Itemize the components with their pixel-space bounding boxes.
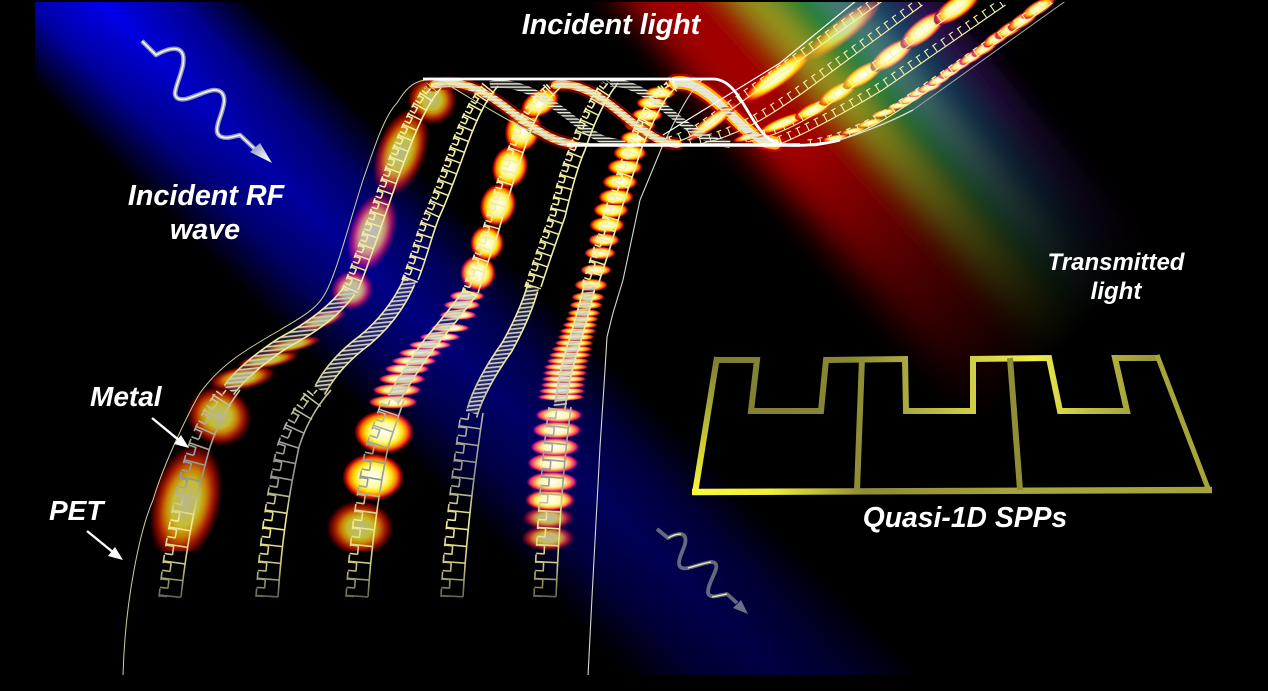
inset dividers: [857, 358, 1020, 490]
inset: quasi-1D SPP unit cells: [692, 355, 1212, 493]
strip 1: [159, 0, 882, 597]
PET substrate outline: [123, 0, 1067, 676]
blue incident RF beam: [35, 2, 910, 675]
label: metal: Metal: [90, 381, 163, 412]
label: transmitted light: light: [1091, 278, 1142, 305]
strip 2: [256, 0, 922, 597]
strip 5: [534, 0, 1052, 597]
hot spots: field intensity on the strips: [137, 0, 1059, 572]
icon: transmitted RF wave arrow: [657, 529, 748, 614]
strip 1 field spots: [137, 75, 457, 572]
label: incident RF wave: wave: [170, 214, 240, 246]
arrow: PET pointer: [87, 531, 123, 560]
label: PET: PET: [49, 495, 106, 526]
fold glow on the crest: [433, 83, 775, 144]
inset comb top edge: [717, 358, 1157, 411]
meander metal strips: [159, 0, 1052, 597]
inset right edge: [1157, 355, 1209, 491]
strip 1 spots, rising right side: [682, 0, 889, 146]
strip 3: [346, 0, 968, 597]
strip 4: [441, 0, 1006, 597]
label: incident light: Incident light: [522, 9, 702, 41]
strip 5 spots, rising right side: [822, 0, 1059, 143]
inset left edge: [695, 357, 717, 493]
label: quasi-1D SPPs: Quasi-1D SPPs: [863, 501, 1067, 533]
label: incident RF wave: Incident RF: [128, 180, 286, 212]
strip 3 spots, rising right side: [732, 0, 986, 145]
strip 5 field spots: [521, 86, 676, 551]
label: transmitted light: Transmitted: [1048, 249, 1186, 276]
strip 3 field spots: [326, 81, 565, 556]
rainbow incident light beam: [592, 2, 1116, 398]
inset bottom edge: [692, 490, 1212, 492]
icon: incident RF wave arrow: [142, 41, 272, 163]
arrow: metal pointer: [152, 418, 189, 448]
